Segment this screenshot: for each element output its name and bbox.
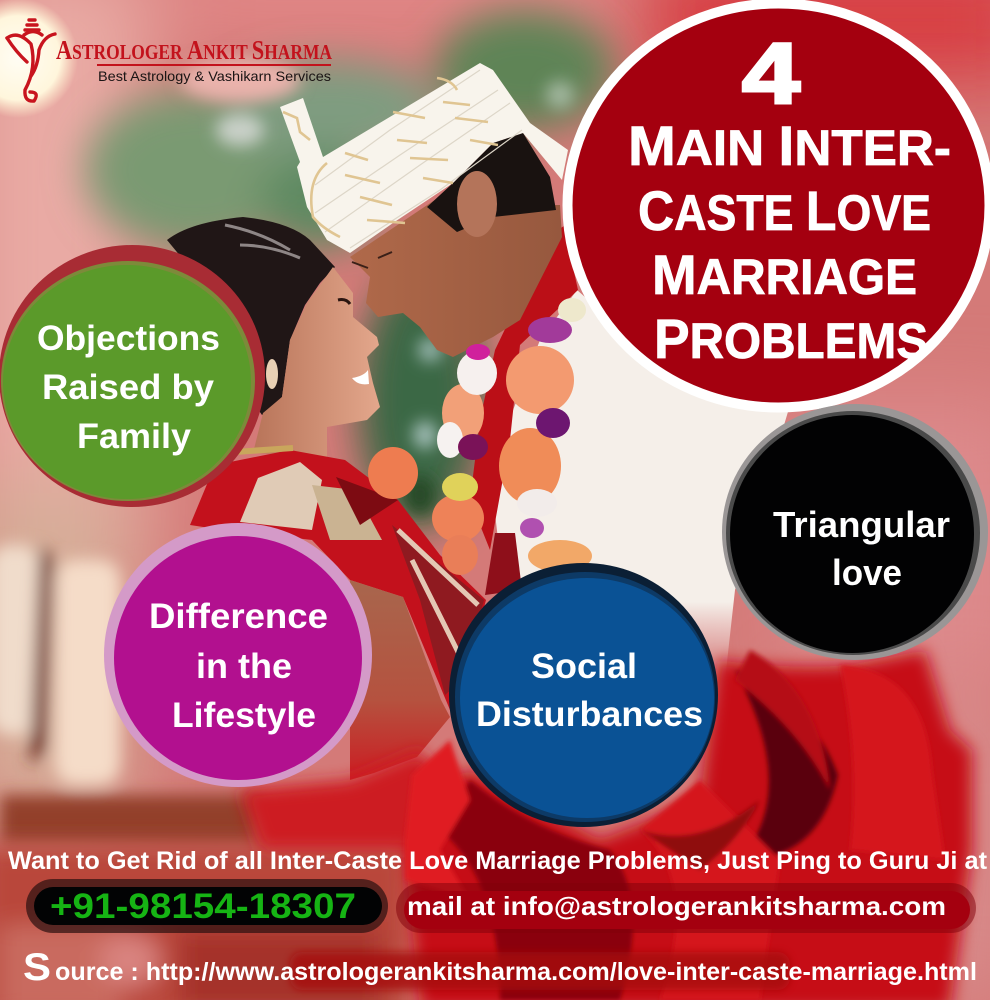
circle: Objections Raised by Family: Raised by — [42, 368, 215, 407]
bride face and neck — [253, 267, 380, 457]
source line: S — [23, 946, 51, 989]
circle: Difference in the Lifestyle — [104, 523, 372, 787]
circle: Triangular love: Triangular — [773, 504, 950, 545]
title text: MARRIAGE — [652, 243, 917, 306]
groom hair — [427, 133, 556, 232]
phone pill: +91-98154-18307 — [50, 887, 356, 926]
call to action text: Want to Get Rid of all Inter-Caste Love Marriage Problems, Just Ping to Guru Ji at — [8, 847, 988, 875]
tassel — [485, 533, 522, 595]
lower red band — [290, 952, 790, 990]
circle: Triangular love: love — [832, 552, 902, 593]
couple photo — [167, 63, 972, 1000]
bride sari — [190, 448, 486, 710]
turban — [280, 63, 568, 253]
title badge — [568, 4, 990, 408]
lower left blur — [0, 845, 410, 1000]
left chairs — [0, 545, 260, 845]
icon: ganesha mark — [7, 20, 55, 101]
groom neck and face — [350, 133, 562, 357]
title text: PROBLEMS — [654, 307, 928, 370]
bride hair — [167, 217, 335, 415]
logo: Astrologer Ankit Sharma — [7, 20, 333, 101]
title text — [628, 114, 951, 370]
title text: CASTE LOVE — [638, 179, 931, 242]
groom ear — [457, 171, 497, 237]
title text: MAIN INTER- — [628, 114, 951, 177]
phone pill — [26, 879, 388, 933]
circle: Social Disturbances — [449, 563, 718, 827]
circle: Objections Raised by Family: Family — [77, 417, 192, 456]
circle: Difference in the Lifestyle: Difference — [149, 597, 328, 636]
circle: Difference in the Lifestyle: in the — [196, 647, 292, 686]
circle: Objections Raised by Family — [0, 245, 265, 507]
groom stole — [470, 226, 578, 550]
bride earring — [266, 359, 278, 389]
logo tagline: Best Astrology & Vashikarn Services — [98, 68, 331, 84]
source line: ource : http://www.astrologerankitsharma.com/love-inter-caste-marriage.html — [55, 958, 977, 986]
bride features — [352, 370, 369, 384]
email pill: mail at info@astrologerankitsharma.com — [407, 891, 946, 921]
rose — [240, 650, 972, 1000]
circle: Social Disturbances: Disturbances — [476, 695, 703, 734]
lamp glow — [0, 0, 78, 118]
circle: Difference in the Lifestyle: Lifestyle — [172, 696, 316, 735]
sari embroidery — [240, 462, 322, 530]
email pill — [396, 883, 976, 933]
source line — [23, 946, 977, 989]
bride arm — [350, 580, 450, 780]
circle: Triangular love — [722, 404, 988, 660]
logo name: ASTROLOGER ANKIT SHARMA — [56, 35, 333, 65]
groom sherwani — [490, 290, 790, 680]
number 4: 4 — [742, 26, 800, 122]
garland — [368, 298, 592, 595]
circle: Social Disturbances: Social — [531, 647, 637, 686]
circle: Objections Raised by Family: Objections — [37, 319, 220, 358]
